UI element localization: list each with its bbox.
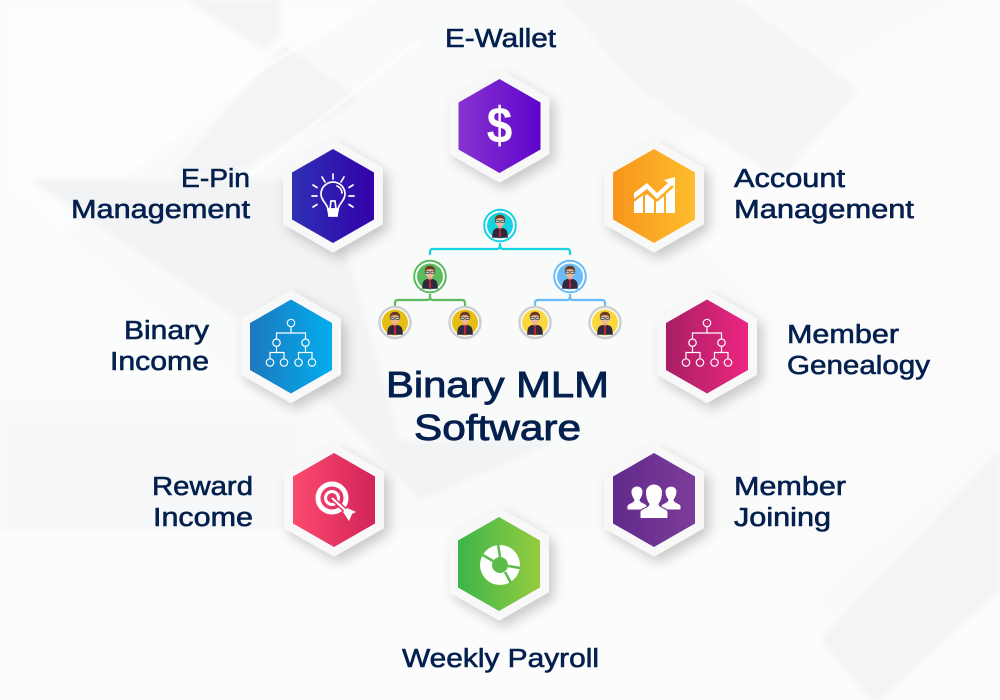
icon: donut chart bbox=[480, 544, 520, 585]
label: Weekly Payroll: Weekly Payroll bbox=[402, 645, 599, 673]
icon: dollar: $ bbox=[487, 97, 512, 154]
avatar: leaf 2 bbox=[450, 307, 480, 338]
icon: target with arrow bbox=[318, 484, 356, 521]
hexagon: E-Pin Management bbox=[284, 140, 382, 252]
avatar: leaf 1 bbox=[380, 307, 410, 338]
hexagon: Member Joining bbox=[605, 444, 703, 556]
avatar: root bbox=[484, 210, 516, 241]
label: Member Genealogy bbox=[787, 321, 930, 380]
avatar: right child bbox=[554, 261, 586, 292]
icon: group of people bbox=[627, 484, 681, 518]
E-Pin Management bbox=[71, 140, 382, 252]
connector lines: right branch bbox=[535, 294, 605, 306]
Member Genealogy bbox=[658, 291, 930, 402]
label: E-Pin Management bbox=[71, 165, 250, 224]
hexagon: Binary Income bbox=[242, 291, 340, 402]
label: Member Genealogy: Member bbox=[787, 321, 900, 349]
Reward Income bbox=[152, 444, 383, 556]
label: Reward Income: Income bbox=[153, 504, 253, 532]
avatar: leaf 3 bbox=[520, 307, 550, 338]
avatar: left child bbox=[414, 261, 446, 292]
hexagon: Weekly Payroll bbox=[450, 508, 548, 620]
icon: network tree bbox=[266, 319, 316, 366]
icon: light bulb bbox=[312, 174, 354, 216]
connector lines: left branch bbox=[395, 294, 465, 306]
org chart bbox=[380, 210, 620, 338]
avatar: leaf 4 bbox=[590, 307, 620, 338]
Weekly Payroll bbox=[402, 508, 599, 673]
hexagon: Member Genealogy bbox=[658, 291, 756, 402]
label: Binary Income: Income bbox=[110, 348, 209, 376]
icon: growth chart bbox=[634, 177, 675, 213]
Member Joining bbox=[605, 444, 847, 556]
hexagon: Account Management bbox=[605, 140, 703, 252]
label: Account Management: Account bbox=[734, 165, 845, 193]
Account Management bbox=[605, 140, 914, 252]
label: Binary Income: Binary bbox=[124, 317, 209, 345]
E-Wallet bbox=[445, 25, 556, 182]
label: Account Management bbox=[734, 165, 914, 224]
label: Reward Income bbox=[152, 473, 253, 532]
Binary Income bbox=[110, 291, 340, 402]
label: Member Joining: Member bbox=[734, 473, 847, 501]
title: Binary MLM bbox=[386, 364, 609, 405]
label: E-Pin Management: E-Pin bbox=[181, 165, 250, 193]
hexagon: Reward Income bbox=[285, 444, 383, 556]
label: E-Wallet: E-Wallet bbox=[445, 25, 556, 53]
title bbox=[386, 364, 609, 448]
icon: network tree bbox=[682, 319, 732, 366]
label: Member Joining bbox=[734, 473, 847, 532]
label: Account Management: Management bbox=[734, 196, 914, 224]
label: Member Joining: Joining bbox=[734, 504, 831, 532]
hexagon: E-Wallet bbox=[450, 70, 548, 182]
label: Reward Income: Reward bbox=[152, 473, 253, 501]
title: Software bbox=[414, 407, 581, 448]
connector lines: top level bbox=[430, 243, 570, 255]
label: E-Pin Management: Management bbox=[71, 196, 250, 224]
label: Binary Income bbox=[110, 317, 209, 376]
label: Member Genealogy: Genealogy bbox=[787, 352, 930, 380]
